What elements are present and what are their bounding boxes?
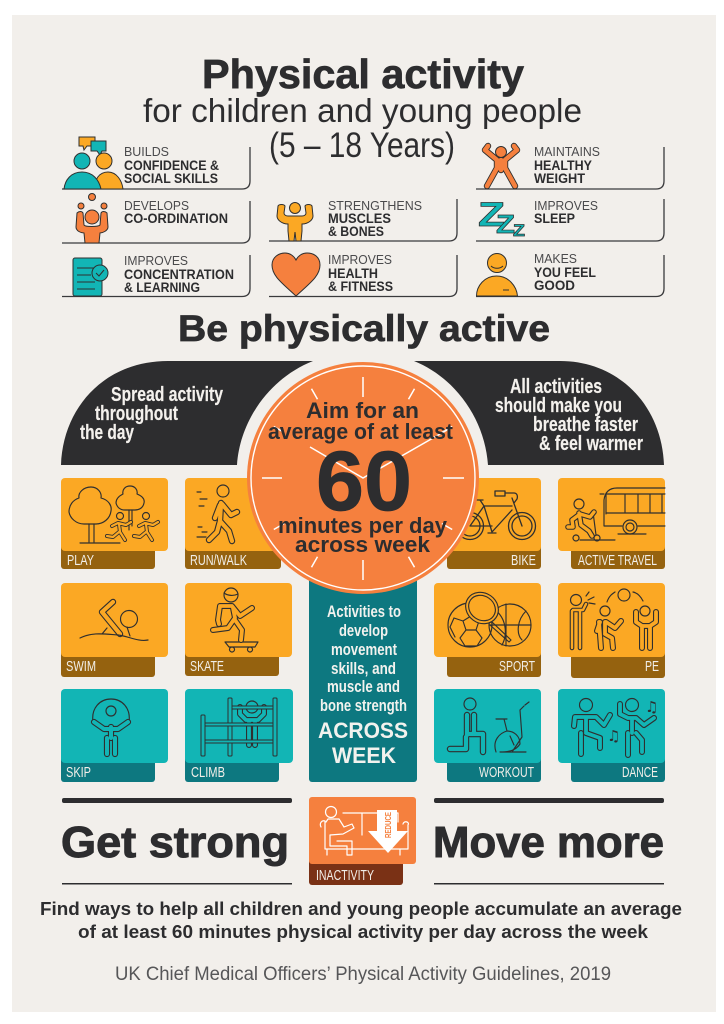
benefit: confidence and social skills: BUILDS <box>124 144 169 159</box>
icon: bus and scooter child <box>568 488 665 541</box>
heading: move more: Move more <box>433 818 664 867</box>
clock: 60 minutes per day: minutes per day <box>278 513 447 538</box>
clock: 60 minutes per day: 60 <box>316 434 412 528</box>
panel: spread activity banner: Spread activity <box>111 383 223 406</box>
benefit: healthy weight: HEALTHY <box>534 158 592 173</box>
icon: skipping rope <box>93 699 129 754</box>
tile: play <box>61 478 168 569</box>
heading: move more <box>433 798 664 884</box>
tile: pe <box>558 583 665 678</box>
benefit: confidence and social skills: SOCIAL SKILLS <box>124 171 218 186</box>
panel: breathe faster banner: should make you <box>495 394 622 417</box>
tile: skate <box>185 583 292 676</box>
tile: inactivity <box>309 797 416 885</box>
tile: skate: SKATE <box>190 658 224 675</box>
icon: document with tick <box>73 258 108 296</box>
clock: 60 minutes per day <box>247 362 479 594</box>
benefit: sleep <box>476 196 664 241</box>
benefit: health and fitness: & FITNESS <box>328 279 393 294</box>
panel: spread activity banner: the day <box>80 421 134 444</box>
benefit: feel good: MAKES <box>534 251 577 266</box>
benefit: health and fitness <box>269 252 457 296</box>
tile: climb: CLIMB <box>191 764 225 781</box>
tile: skip <box>61 689 168 782</box>
benefit: healthy weight: WEIGHT <box>534 171 586 186</box>
icon: climbing frame <box>201 698 277 756</box>
call to action text: Find ways to help all children and young people accumulate an average <box>40 899 682 919</box>
icon: teacher and children with ball <box>570 589 656 648</box>
panel: across week: movement <box>331 640 397 659</box>
tile: swim <box>61 583 168 677</box>
benefit: feel good: GOOD <box>534 278 575 293</box>
benefit: co-ordination: DEVELOPS <box>124 198 189 213</box>
icon: person on sofa <box>320 806 408 855</box>
panel: across week: bone strength <box>320 696 407 715</box>
benefit: concentration and learning <box>62 253 250 296</box>
icon: walking figure <box>197 485 237 541</box>
tile: workout: WORKOUT <box>479 764 534 781</box>
icon: football, basketball and racket <box>448 586 531 647</box>
icon: trees and running children <box>69 486 150 543</box>
tile: inactivity: INACTIVITY <box>316 867 374 884</box>
icon: bicycle <box>456 491 536 540</box>
benefit: sleep: SLEEP <box>534 211 575 226</box>
benefit: confidence and social skills <box>62 137 250 189</box>
call to action text <box>40 899 682 942</box>
benefit: concentration and learning: & LEARNING <box>124 280 200 295</box>
panel: across week: Activities to <box>327 602 401 621</box>
benefit: sleep: IMPROVES <box>534 198 598 213</box>
tile: run/walk: RUN/WALK <box>190 552 247 569</box>
tile: workout <box>434 689 541 782</box>
benefit: co-ordination: CO-ORDINATION <box>124 211 228 226</box>
tile: play: PLAY <box>67 552 94 569</box>
title: Physical activity <box>202 51 524 97</box>
heading: get strong <box>61 798 292 884</box>
tile: climb <box>185 689 293 782</box>
panel: across week: WEEK <box>332 743 396 768</box>
clock: 60 minutes per day: Aim for an <box>306 398 419 423</box>
benefit: feel good <box>476 251 664 296</box>
icon: smiling person <box>476 254 518 296</box>
panel: across week: skills, and <box>331 659 396 678</box>
tile: swim: SWIM <box>66 658 96 675</box>
icon: star jump person <box>485 146 517 186</box>
tile: sport: SPORT <box>499 658 535 675</box>
icon: flexing person <box>277 202 313 241</box>
panel: across week: develop <box>339 621 388 640</box>
tile: dance: DANCE <box>622 764 658 781</box>
panel: breathe faster banner <box>414 361 664 465</box>
icon: zzz <box>478 196 525 240</box>
icon: two dancers and music notes: ♫ <box>645 698 658 716</box>
tile: pe: PE <box>645 658 659 675</box>
panel: across week: ACROSS <box>318 718 408 743</box>
tile: dance <box>558 689 665 782</box>
title: for children and young people <box>143 92 582 129</box>
panel: breathe faster banner: & feel warmer <box>539 432 643 455</box>
benefit: healthy weight <box>476 144 664 189</box>
icon: zzz: Z <box>496 209 515 239</box>
panel: breathe faster banner: breathe faster <box>533 413 638 436</box>
icon: two dancers and music notes: ♫ <box>607 727 620 745</box>
tile: skip: SKIP <box>66 764 91 781</box>
benefit: muscles and bones: STRENGTHENS <box>328 198 422 213</box>
benefit: healthy weight: MAINTAINS <box>534 144 600 159</box>
icon: zzz: Z <box>478 196 505 234</box>
icon: heart <box>272 253 320 296</box>
title: (5 – 18 Years) <box>269 126 455 165</box>
tile: active travel: ACTIVE TRAVEL <box>578 552 657 569</box>
benefit: muscles and bones: & BONES <box>328 224 384 239</box>
heading: be physically active: Be physically active <box>178 308 550 349</box>
icon: skateboarder <box>213 588 258 652</box>
benefit: concentration and learning: IMPROVES <box>124 253 188 268</box>
panel: spread activity banner <box>61 361 313 465</box>
panel: across week <box>309 560 417 782</box>
source line: UK Chief Medical Officers’ Physical Activity Guidelines, 2019 <box>115 964 611 985</box>
panel: breathe faster banner: All activities <box>510 375 602 398</box>
icon: two dancers and music notes <box>574 698 658 755</box>
benefit: muscles and bones: MUSCLES <box>328 211 391 226</box>
benefit: muscles and bones <box>269 198 457 241</box>
icon: swimmer <box>80 602 148 640</box>
tile: run/walk <box>185 478 293 569</box>
clock: 60 minutes per day: across week <box>295 532 430 557</box>
heading: get strong: Get strong <box>61 818 289 867</box>
tile: bike <box>434 478 541 569</box>
icon: zzz: Z <box>513 221 525 240</box>
icon: child juggling <box>76 194 108 243</box>
panel: spread activity banner: throughout <box>95 402 178 425</box>
icon: lunge and exercise bike <box>450 698 529 752</box>
icon: reduce arrow: REDUCE <box>384 811 393 838</box>
call to action text: of at least 60 minutes physical activity per day across the week <box>78 922 649 942</box>
clock: 60 minutes per day: average of at least <box>268 419 453 444</box>
benefit: feel good: YOU FEEL <box>534 265 596 280</box>
benefit: health and fitness: HEALTH <box>328 266 378 281</box>
tile: sport <box>434 583 541 677</box>
benefit: health and fitness: IMPROVES <box>328 252 392 267</box>
title <box>143 51 582 165</box>
tile: active travel <box>558 478 665 569</box>
panel: across week: muscle and <box>327 677 400 696</box>
benefit: confidence and social skills: CONFIDENCE & <box>124 158 219 173</box>
benefit: co-ordination <box>62 194 250 243</box>
benefit: concentration and learning: CONCENTRATION <box>124 267 234 282</box>
tile: bike: BIKE <box>511 552 536 569</box>
icon: two people talking <box>64 137 123 189</box>
